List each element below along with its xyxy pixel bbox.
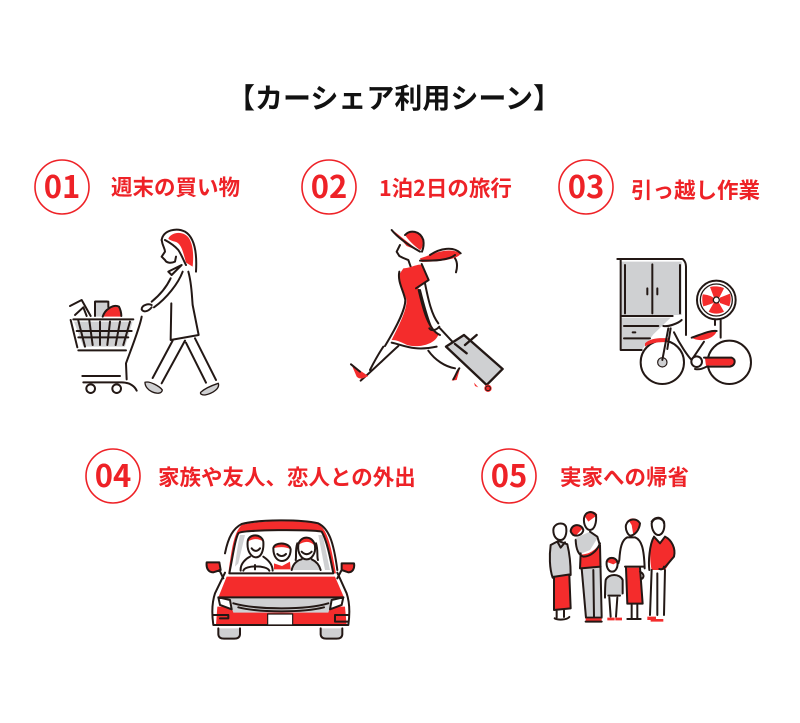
scene 02 heading <box>302 160 512 214</box>
scene 03 heading <box>559 160 760 214</box>
icon: woman in red dress with suitcase <box>351 230 503 392</box>
grandmother <box>550 523 571 620</box>
scene 04 heading: 家族や友人、恋人との外出 <box>158 461 416 492</box>
icon: woman pushing shopping cart <box>70 230 219 395</box>
father with child <box>571 511 602 622</box>
scene 02 heading: 02 <box>311 162 347 207</box>
scene 02 heading: 1泊2日の旅行 <box>379 172 512 203</box>
scene 05 heading: 実家への帰省 <box>560 461 689 492</box>
scene 03 heading: 引っ越し作業 <box>631 174 760 205</box>
child <box>605 558 623 620</box>
icon: wardrobe, fan and bicycle <box>617 259 751 384</box>
grandfather <box>647 518 674 622</box>
icon: three-generation family <box>550 511 674 622</box>
mother <box>618 518 645 619</box>
title: 【カーシェア利用シーン】 <box>227 77 561 117</box>
scene 01 heading <box>35 160 240 214</box>
scene 05 heading: 05 <box>491 451 527 496</box>
scene 01 heading: 週末の買い物 <box>111 171 240 202</box>
scene 01 heading: 01 <box>44 162 80 207</box>
scene 05 heading <box>482 449 689 503</box>
scene 03 heading: 03 <box>568 162 604 207</box>
icon: family in car <box>207 520 354 639</box>
scene 04 heading <box>86 449 416 503</box>
scene 04 heading: 04 <box>95 451 131 496</box>
